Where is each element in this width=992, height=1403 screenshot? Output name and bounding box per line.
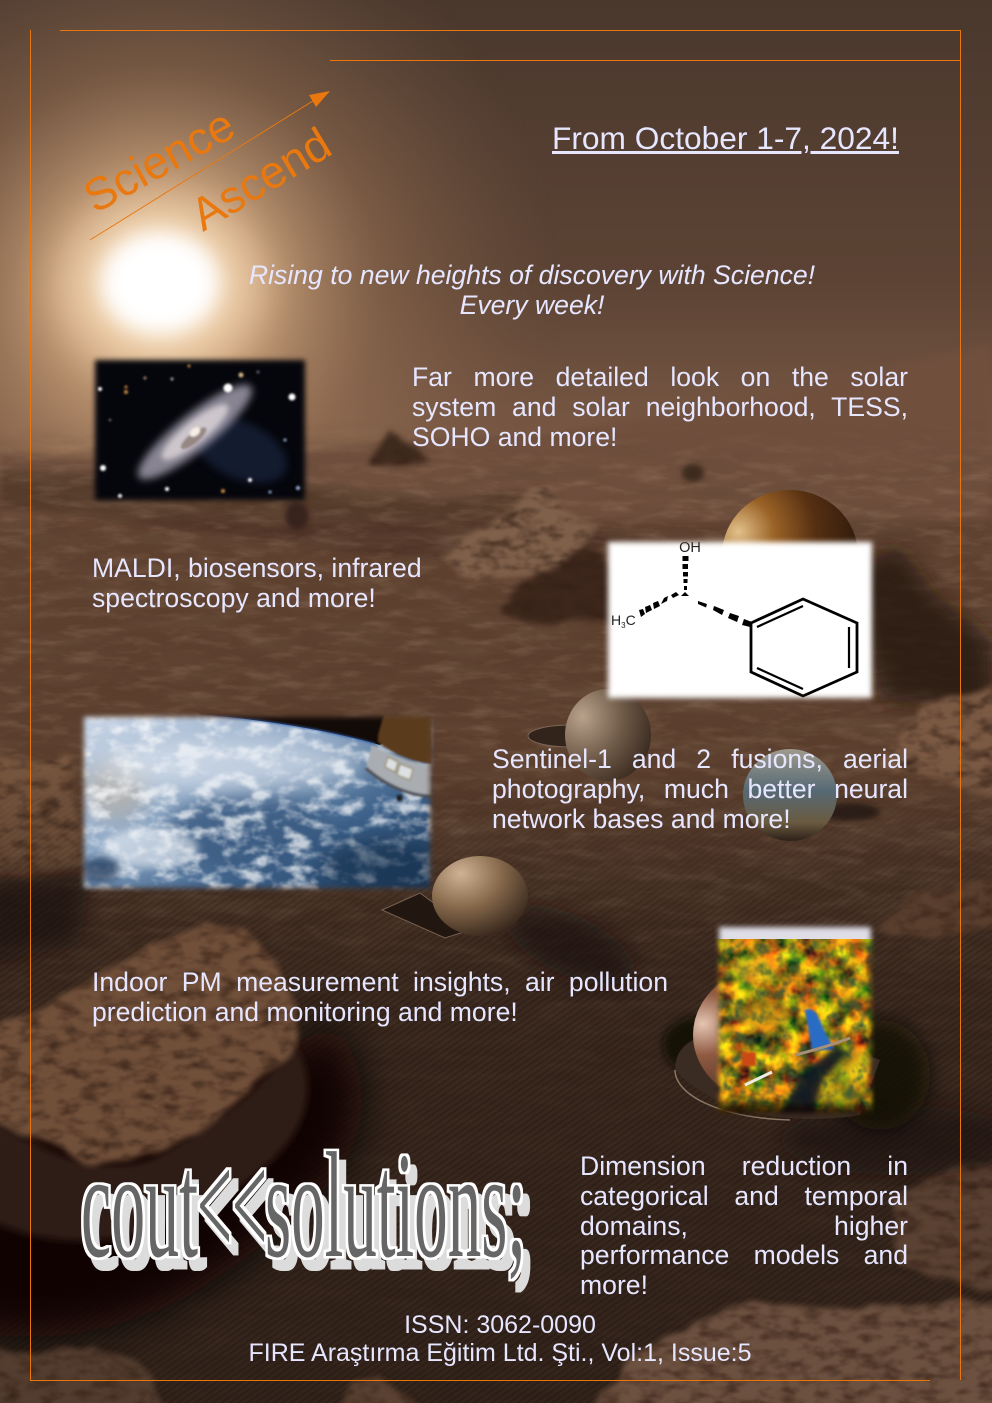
text: solar system: Far more detailed look on the solar system and solar neighborhood, TESS, SOHO and more! [412,362,908,452]
photo: autumn forest [712,920,880,1125]
logo: Science Ascend: Ascend [181,117,340,241]
tagline: Every week! [460,290,604,320]
logo: Science Ascend: Science [75,98,243,223]
text: dimension reduction: Dimension reduction in categorical and temporal domains, higher performance models and more! [580,1151,908,1300]
black space above limb [198,712,422,745]
side rocks [0,464,992,965]
egg: pale with ring [528,689,651,781]
date heading: From October 1-7, 2024! [552,120,899,156]
wordart: cout<<solutions;: solutions; [265,1123,526,1290]
dashed bonds [639,556,752,627]
arrow [90,91,330,240]
egg: bluish [743,749,880,841]
footer: ISSN and publisher [249,1311,751,1367]
benzene ring [751,599,857,696]
galaxy core and arms [133,379,257,485]
text: spectroscopy: MALDI, biosensors, infrared spectroscopy and more! [92,553,422,613]
tagline [249,260,815,320]
photo: galaxy [88,353,312,507]
photo: molecule diagram: C [626,612,636,628]
photo: earth from orbit [78,700,440,895]
stars [98,364,300,498]
egg: amber [722,490,858,620]
footer: ISSN and publisher: ISSN: 3062-0090 [404,1311,596,1339]
text: air pollution: Indoor PM measurement insights, air pollution prediction and monitoring and more! [92,967,668,1027]
text: remote sensing: Sentinel-1 and 2 fusions, aerial photography, much better neural network bases and more! [492,744,908,834]
wordart: cout<<solutions;: cout [81,1123,198,1290]
footer: ISSN and publisher: FIRE Araştırma Eğitim Ltd. Şti., Vol:1, Issue:5 [249,1339,751,1367]
photo: molecule diagram [600,535,880,705]
bottom rocks [0,875,992,1403]
tagline: Rising to new heights of discovery with Science! [249,260,815,290]
spacecraft [366,714,432,801]
sun [60,200,260,370]
photo: molecule diagram: H [611,612,621,628]
wordart: cout<<solutions; [81,1123,526,1290]
wordart: cout<<solutions;: << [197,1123,267,1290]
large rock left [0,925,362,1337]
labels: OH [679,540,701,556]
ridge rocks [360,428,660,630]
lower ground darkening [0,760,992,1403]
egg: tan on saucer [382,856,528,938]
egg: copper with saucer [663,965,930,1130]
logo: Science Ascend [75,98,340,241]
photo: molecule diagram: 3 [621,621,626,630]
sandy texture [7,435,992,940]
horizon ridges [0,345,992,560]
